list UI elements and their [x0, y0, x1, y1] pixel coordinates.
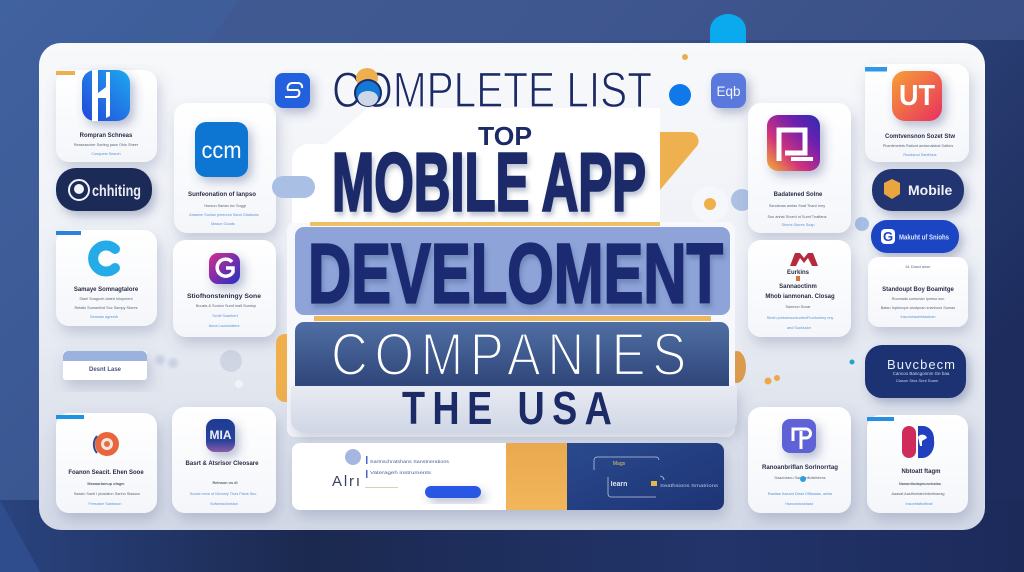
- left content: Vaterageh instruments: [370, 470, 432, 475]
- card: split P: Aaasat Aastfnmtahnbfanfnanag: [892, 492, 944, 496]
- card: purple P: Daacivtanu Sangonflutstlvbms: [774, 476, 826, 480]
- card: Stanford: Batan Inptonupe anotpnan snarhoos Sumao: [881, 306, 955, 310]
- icon: title emblem: [354, 68, 382, 107]
- icon: small heart: [800, 476, 806, 482]
- card: P gradient: [748, 103, 851, 233]
- banner: the usa: THE USA: [402, 382, 612, 434]
- button: [425, 486, 481, 498]
- card: UT: Comtvensnon Sozet Stw: [885, 134, 955, 140]
- card: spiral: Femzane Santason: [89, 502, 121, 506]
- card: M: Eurkins: [787, 270, 810, 276]
- pill: mobile: Mobile: [908, 182, 953, 198]
- tab: left orange: [276, 334, 300, 402]
- callout: ribbon box: [63, 351, 147, 380]
- card: split P: Nbtoatt ftagm: [902, 469, 940, 475]
- icon: split P: [902, 426, 934, 458]
- callout: dark box: Clason Stos Sunt Soam: [896, 378, 939, 383]
- left content: [332, 449, 450, 490]
- callout: dark box: [865, 345, 966, 398]
- bubble: blue pill: [272, 176, 315, 198]
- card: M: and Sucksstor: [787, 326, 812, 330]
- card: cyan C: [56, 230, 157, 326]
- title backing panel: [292, 108, 660, 223]
- tab: cyan top accent: [710, 14, 746, 44]
- card: cyan C: Stanl Snagnoh dated Inlopment: [79, 297, 134, 301]
- card: G app: Bousts & Sonion Sumf Inalt Sumtop: [196, 304, 256, 308]
- card: ccm: Hurson Sartan Inc Soggi: [204, 204, 246, 208]
- tab: right orange: [728, 351, 746, 383]
- card: top left: Reasearcher Sorting pace Ohio Sheer: [74, 143, 139, 147]
- card: Stanford: Standoupt Boy Boamitge: [882, 287, 954, 293]
- pill: blue G: Makuht uf Sniohs: [899, 232, 949, 242]
- icon: MIA: MIA: [210, 428, 232, 442]
- diagram: Iearn: [611, 481, 627, 488]
- card: G app: Anna Launshaters: [209, 324, 240, 328]
- panel: bottom strip: [292, 443, 724, 510]
- icon: P: [767, 115, 820, 171]
- card: MIA: Basrt & Atsrisor Cleosare: [186, 461, 259, 467]
- card: spiral: Foanon Seacit. Ehen Sooe: [68, 470, 144, 476]
- tag: [865, 67, 887, 72]
- callout: ribbon box: Desnt Lase: [89, 367, 122, 373]
- card: Stanford: Roomads somurtan Ipneso son: [892, 297, 944, 301]
- callout: dark box: Cancoo Bancgonnm Ge baa: [893, 371, 950, 376]
- card: split P: Nanantlodapnunchatas: [899, 482, 941, 486]
- accent rule: [314, 316, 711, 321]
- banner: development: DEVELOMENT: [308, 226, 723, 320]
- card: spiral: Saasin Sanit I plostatnn Sanhn Slasson: [74, 492, 140, 496]
- card: cyan C: Samaye Somnagtalore: [74, 287, 139, 293]
- heading: mobile app: MOBILE APP: [332, 136, 646, 228]
- card: split P: [867, 415, 968, 513]
- card: P gradient: Shorts Stores Soap: [782, 223, 814, 227]
- tag: [867, 417, 894, 421]
- card: Stanford: [868, 257, 968, 327]
- accent rule: [310, 222, 660, 226]
- card: Stanford: Insonnhaselntastnan: [900, 315, 936, 319]
- title: complete list: COMPLETE LIST: [332, 62, 652, 118]
- card: MIA: Scoad more of Mommy Thes Flans Seo: [190, 492, 256, 496]
- pill: chehiting: chhiting: [92, 183, 141, 200]
- icon: blue H app: [82, 70, 130, 121]
- pill: chehiting: [56, 168, 152, 211]
- app icon: Eqb: [711, 73, 746, 108]
- card: M: Stmth pmtuensontuntenFrontuntmy nny: [767, 316, 833, 320]
- arrow: orange pointer: [655, 132, 699, 190]
- card: ccm: [174, 103, 276, 233]
- pill: mobile: [872, 169, 964, 211]
- card: UT: [865, 64, 969, 162]
- diagram: Seathsions Smatrions: [660, 483, 719, 488]
- app icon: Eqb: Eqb: [716, 83, 741, 99]
- card: M: Sannaoctinm: [779, 284, 817, 290]
- app icon: blue chat: [275, 73, 310, 108]
- pill: blue G: [871, 220, 959, 253]
- card: P gradient: Badatened Solne: [774, 192, 823, 198]
- card: UT: Phantimetets Rationt andsmalsbal Salfors: [883, 144, 953, 148]
- card: G app: [173, 240, 276, 337]
- callout: dark box: Buvcbecm: [887, 357, 955, 372]
- card: top left: Conquest Search: [91, 152, 121, 156]
- card: ccm: Mason Goods: [211, 222, 235, 226]
- card: top left: [56, 70, 157, 162]
- card: Stanford: b1 Dosot anon: [906, 265, 930, 269]
- card: top left: Rompran Schneas: [80, 133, 133, 139]
- diagram: [594, 457, 719, 497]
- main panel: [39, 43, 985, 530]
- card: MIA: Sofiamachinston: [210, 502, 238, 506]
- icon: cube: [884, 179, 900, 199]
- card: purple P: Hanoonarashast: [785, 502, 814, 506]
- tag: [56, 231, 81, 235]
- tag: [56, 415, 84, 419]
- card: M: Sanmon Scoar: [785, 305, 811, 309]
- card: spiral: Manaartamup ofagm: [87, 482, 125, 486]
- icon: G: [209, 253, 240, 284]
- card: purple P: Ranoanbriflan Sorlnorrtag: [762, 465, 838, 471]
- navy block: [567, 443, 724, 510]
- card: ccm: Sunfeonation of Ianpso: [188, 192, 256, 198]
- card: spiral: [56, 413, 157, 513]
- card: purple P: Raattae Aaeant Dlaat Oflfsaaas, antas: [768, 492, 832, 496]
- card: cyan C: Seaman agreeth: [90, 315, 118, 319]
- icon: red M: [790, 253, 818, 266]
- card: MIA: Retnson ns dl: [212, 481, 238, 485]
- left content: Alrı: [332, 473, 360, 490]
- pill: blue G: G: [883, 229, 893, 244]
- center white backing: [287, 222, 735, 437]
- card: ccm: Anasem Sunlan pmerson Sand Gladsons: [189, 213, 259, 217]
- icon: P: [782, 419, 816, 453]
- card: G app: Stiofhonsteningy Sone: [187, 294, 262, 300]
- diagram: Mags: [613, 461, 626, 467]
- card: P gradient: Sandsnas amtas Snaf Thant Imry: [769, 204, 825, 208]
- card: UT: Rosdanot Santfolus: [903, 153, 937, 157]
- icon: ccm: ccm: [202, 137, 242, 163]
- left content: Sartnschratshans Sanstnerations: [370, 459, 450, 464]
- card: MIA: [172, 407, 276, 513]
- card: purple P: [748, 407, 851, 513]
- icon: cyan C: [93, 246, 115, 272]
- tag: [56, 71, 75, 75]
- banner: the usa: [291, 382, 737, 434]
- decorative bubbles: [155, 54, 869, 388]
- banner: companies: COMPANIES: [331, 321, 686, 388]
- card: M: Mhob ianmonan. Closag: [765, 294, 835, 300]
- icon: spiral: [94, 432, 119, 456]
- card: cyan C: Retails Sumanhist Soc Sampy Stores: [74, 306, 138, 310]
- card: G app: Schill Soanbert: [212, 314, 239, 318]
- card: P gradient: Son anhst Shomf nt Sumf Tnaffans: [768, 215, 827, 219]
- card: M: [748, 240, 851, 337]
- heading: top: TOP: [478, 121, 532, 151]
- orange block: [506, 443, 567, 510]
- icon: UT: UT: [899, 80, 935, 112]
- card: split P: Insonhtafsnftnat: [905, 502, 933, 506]
